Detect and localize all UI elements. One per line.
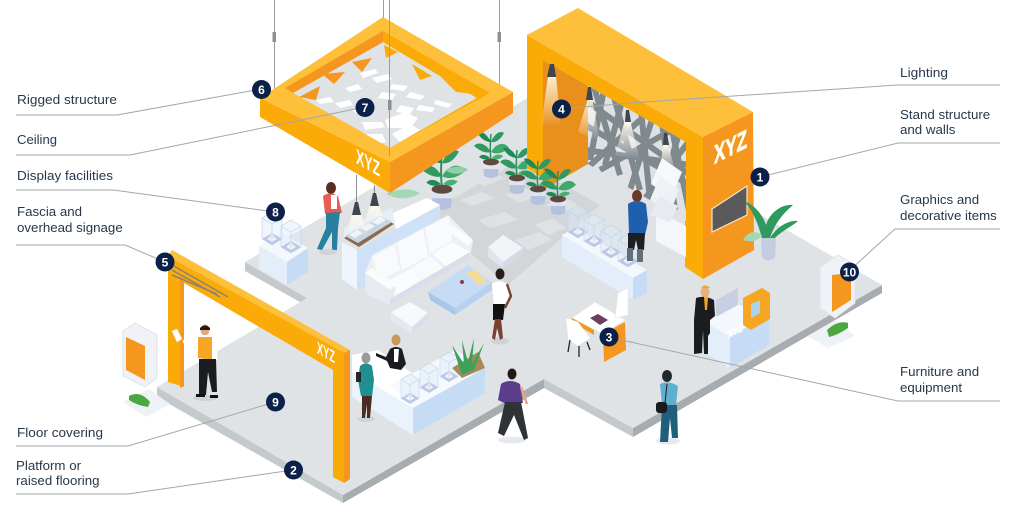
badge 3: 3 (606, 330, 613, 344)
ottoman (391, 302, 428, 333)
rigging cables (272, 0, 501, 92)
labels right (900, 65, 997, 395)
reception desk front (352, 338, 485, 435)
totem left (123, 323, 170, 417)
platform floor (157, 89, 882, 503)
floor surface (157, 89, 882, 495)
leader lines (16, 85, 1000, 494)
badge 6 (252, 80, 271, 99)
front arch fascia (168, 250, 350, 483)
badge 7: 7 (362, 101, 369, 115)
badge 9: 9 (272, 396, 279, 410)
woman in teal dress (356, 352, 375, 422)
badge 1 (750, 168, 770, 186)
label: stand structure: and walls (900, 122, 956, 137)
badge 10 (840, 262, 859, 282)
display table with chairs (566, 288, 628, 362)
sofa left arm (365, 271, 396, 305)
back plants (474, 131, 535, 194)
graphic wall (588, 86, 686, 221)
XYZ on desk: XYZ (728, 320, 743, 342)
monitor (716, 288, 738, 317)
label: lighting: Lighting (900, 65, 948, 80)
man with shoulder bag (656, 370, 680, 444)
label: graphics: Graphics and (900, 192, 979, 207)
label: furniture: Furniture and (900, 364, 979, 379)
badge 8 (266, 202, 285, 222)
badge 2: 2 (290, 464, 297, 478)
wall spotlights (541, 64, 675, 170)
monitor desk (707, 288, 770, 368)
label: stand structure: Stand structure (900, 107, 990, 122)
badge 5 (156, 252, 174, 272)
chair back (615, 288, 628, 318)
label: fascia and overhead signage: overhead signage (17, 220, 123, 235)
label: graphics: decorative items (900, 208, 997, 223)
display cabinet right (562, 205, 647, 300)
inner orange panel (543, 60, 588, 190)
man looking at wall (627, 190, 648, 262)
plant behind ceiling (386, 150, 468, 210)
overhead signage lines (172, 265, 228, 297)
badge 4 (552, 100, 571, 118)
sofa base (365, 215, 473, 305)
totem right (808, 255, 855, 348)
sofa front rail (390, 252, 470, 306)
sofa right arm (449, 225, 473, 246)
wall top (527, 8, 753, 137)
XYZ sign on wall: XYZ (714, 124, 747, 170)
plant beside wall (743, 202, 798, 261)
man in suit (694, 286, 715, 354)
centre cable (388, 0, 392, 156)
label: platform: raised flooring (16, 473, 100, 488)
badge 9 (266, 392, 285, 412)
label: fascia and overhead signage: Fascia and (17, 204, 82, 219)
platform side edges (157, 387, 343, 503)
badge 6: 6 (258, 83, 265, 97)
coffee table (428, 265, 492, 315)
sofa backs (372, 245, 400, 280)
label: furniture: equipment (900, 380, 962, 395)
labels left (16, 92, 123, 488)
badge 1: 1 (757, 170, 764, 184)
chair front (566, 318, 590, 357)
wall side (703, 112, 754, 279)
badge 4: 4 (558, 102, 565, 116)
leaflet rack (650, 158, 686, 257)
central counter (342, 198, 440, 290)
badge 7 (356, 98, 374, 117)
receptionist (376, 334, 406, 370)
greeter man (172, 324, 218, 401)
badge 3 (600, 328, 618, 346)
badge 8: 8 (272, 206, 279, 220)
display case on counter (344, 208, 395, 247)
man in purple (498, 368, 528, 444)
right ottoman (488, 235, 523, 268)
XYZ sign on ceiling: XYZ (356, 144, 380, 182)
display facilities left cabinet (259, 212, 308, 285)
badge 2 (284, 460, 303, 480)
woman in skirt (491, 268, 511, 344)
XYZ sign on arch: XYZ (317, 337, 335, 367)
badge 5: 5 (162, 256, 169, 270)
stand structure and walls (527, 8, 754, 279)
ceiling lattice (293, 42, 477, 148)
ceiling structure (260, 0, 513, 193)
sofa seats (385, 268, 421, 296)
label: ceiling: Ceiling (17, 132, 57, 147)
ceiling shadow on floor (425, 160, 600, 285)
orange frame (743, 288, 770, 330)
number badges (156, 80, 859, 480)
plants by display (521, 158, 576, 215)
label: rigged structure: Rigged structure (17, 92, 117, 107)
label: display facilities: Display facilities (17, 168, 113, 183)
label: platform: Platform or (16, 458, 82, 473)
grass planter (452, 338, 485, 378)
sofa (365, 215, 473, 306)
lamps hanging (345, 175, 386, 235)
woman in red jacket (317, 182, 342, 255)
label: floor covering: Floor covering (17, 425, 103, 440)
wall front frame (527, 35, 703, 279)
screen on wall (712, 186, 747, 232)
badge 10: 10 (843, 266, 856, 280)
